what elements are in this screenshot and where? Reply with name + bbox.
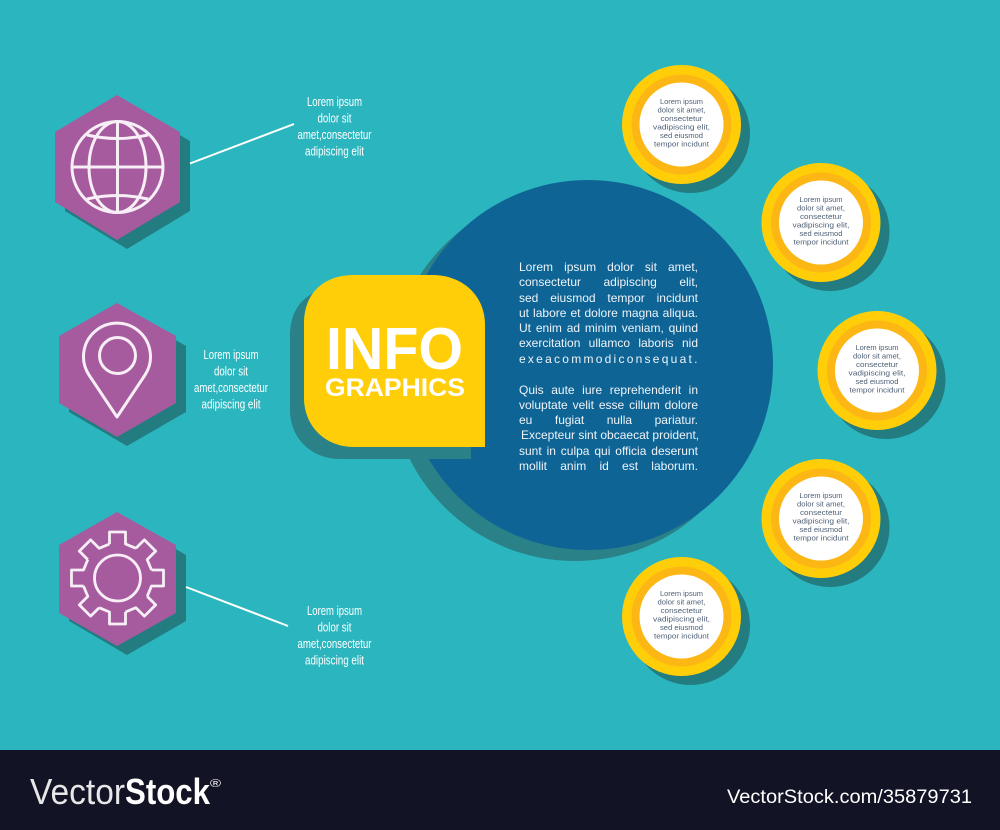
- body text: voluptate velit esse cillum dolore: [519, 398, 698, 412]
- label: gear: amet,consectetur: [298, 637, 372, 651]
- footer logo: [30, 771, 221, 812]
- label: globe: amet,consectetur: [298, 128, 372, 142]
- circle item 4: sed eiusmod: [800, 525, 842, 534]
- circle item 1: [622, 65, 750, 193]
- circle item 3: Lorem ipsum: [856, 343, 899, 352]
- circle item 5: consectetur: [660, 606, 703, 615]
- circle item 5: dolor sit amet,: [657, 598, 706, 606]
- label: location pin: adipiscing elit: [202, 398, 261, 412]
- circle item 3: sed eiusmod: [856, 377, 898, 386]
- label: globe: dolor sit: [318, 112, 352, 126]
- label: location pin: dolor sit: [214, 364, 248, 378]
- circle item 1: vadipiscing elit,: [653, 122, 710, 132]
- circle item 3: dolor sit amet,: [853, 352, 901, 360]
- label: location pin: amet,consectetur: [194, 381, 268, 395]
- connector line: globe: [190, 124, 294, 164]
- circle item 3: [818, 311, 946, 439]
- circle item 4: consectetur: [800, 508, 843, 517]
- circle item 2: consectetur: [800, 212, 843, 221]
- circle item 1: consectetur: [660, 114, 703, 123]
- circle item 3: tempor incidunt: [850, 386, 905, 394]
- circle item 5: Lorem ipsum: [660, 589, 703, 598]
- circle item 3: vadipiscing elit,: [848, 368, 906, 378]
- icon: globe: [72, 122, 163, 212]
- label: gear: Lorem ipsum: [307, 604, 362, 618]
- circle item 5: tempor incidunt: [654, 632, 709, 640]
- circle item 4: [762, 459, 890, 587]
- footer logo: Stock: [125, 771, 211, 812]
- circle item 4: Lorem ipsum: [800, 491, 843, 500]
- circle item 2: tempor incidunt: [794, 238, 849, 246]
- body text: Ut enim ad minim veniam, quind: [519, 321, 698, 335]
- circle item 2: sed eiusmod: [800, 229, 842, 238]
- circle item 2: dolor sit amet,: [797, 204, 845, 212]
- circle item 2: [762, 163, 890, 291]
- body text: Excepteur sint obcaecat proident,: [521, 428, 699, 442]
- body text: eu fugiat nulla pariatur.: [519, 413, 698, 427]
- panel: title badge: [290, 275, 485, 459]
- body text: Quis aute iure reprehenderit in: [519, 382, 698, 396]
- circle item 5: vadipiscing elit,: [653, 614, 710, 624]
- panel: central circle: [390, 180, 773, 561]
- circle item 5: sed eiusmod: [660, 623, 703, 632]
- body text: mollit anim id est laborum.: [519, 459, 698, 473]
- circle item 1: Lorem ipsum: [660, 97, 703, 106]
- body text: sed eiusmod tempor incidunt: [519, 290, 698, 304]
- circle item 2: Lorem ipsum: [800, 195, 843, 204]
- connector line: gear: [186, 587, 288, 626]
- body text: exeacommodiconsequat.: [519, 352, 700, 366]
- circle item 5: [622, 557, 750, 685]
- label: location pin: Lorem ipsum: [204, 348, 258, 362]
- icon: location pin: [83, 323, 150, 417]
- body text: consectetur adipiscing elit,: [519, 275, 698, 289]
- title: INFO: INFO: [326, 316, 463, 382]
- footer logo: ®: [210, 778, 221, 790]
- subtitle: GRAPHICS: GRAPHICS: [325, 374, 465, 402]
- circle item 3: consectetur: [856, 360, 899, 369]
- circle item 1: sed eiusmod: [660, 131, 703, 140]
- label: gear: adipiscing elit: [305, 654, 364, 668]
- label: globe: adipiscing elit: [305, 144, 364, 158]
- label: gear: dolor sit: [318, 620, 352, 634]
- circle item 1: dolor sit amet,: [657, 106, 706, 114]
- hexagon: location pin: [59, 303, 186, 446]
- circle item 4: vadipiscing elit,: [792, 516, 850, 526]
- body text: exercitation ullamco laboris nid: [519, 336, 698, 350]
- body text: sunt in culpa qui officia deserunt: [519, 444, 698, 458]
- circle item 4: dolor sit amet,: [797, 500, 845, 508]
- hexagon: globe: [55, 95, 190, 249]
- body text: ut labore et dolore magna aliqua.: [519, 306, 698, 320]
- body text: Lorem ipsum dolor sit amet,: [519, 260, 698, 274]
- footer image id: VectorStock.com/35879731: [727, 787, 972, 808]
- hexagon: gear: [59, 512, 186, 655]
- circle item 2: vadipiscing elit,: [792, 220, 850, 230]
- icon: gear: [72, 532, 164, 624]
- body text: [519, 260, 700, 473]
- label: location pin: [194, 348, 268, 412]
- circle item 1: tempor incidunt: [654, 140, 709, 148]
- footer logo: Vector: [30, 771, 125, 812]
- label: globe: Lorem ipsum: [307, 95, 362, 109]
- label: globe: [298, 95, 372, 158]
- label: gear: [298, 604, 372, 668]
- footer bar: [0, 750, 1000, 830]
- circle item 4: tempor incidunt: [794, 534, 849, 542]
